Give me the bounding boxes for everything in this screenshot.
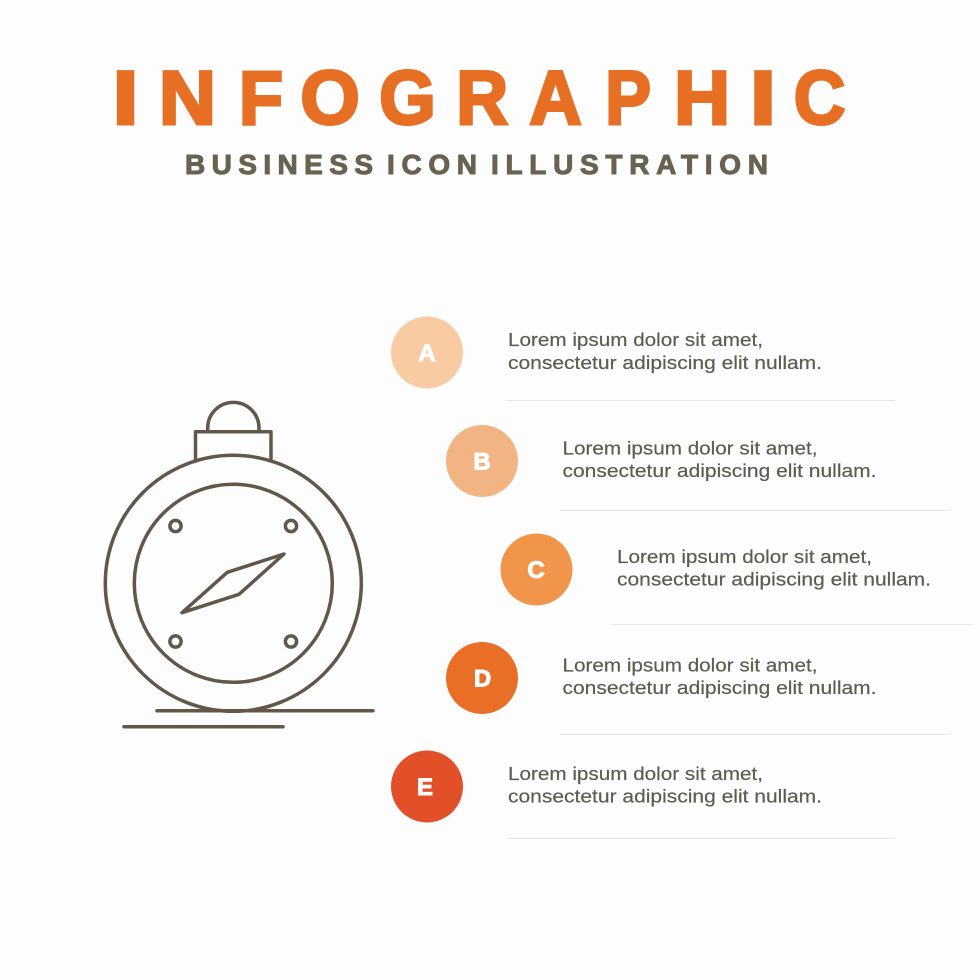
title: H xyxy=(674,56,730,141)
item E xyxy=(391,750,895,839)
title xyxy=(112,56,845,141)
title: P xyxy=(605,56,651,141)
subtitle: ICON xyxy=(387,149,477,180)
item C xyxy=(500,534,972,625)
title: G xyxy=(379,56,436,141)
item E: consectetur adipiscing elit nullam. xyxy=(508,786,822,806)
item A: Lorem ipsum dolor sit amet, xyxy=(508,329,763,350)
item A: consectetur adipiscing elit nullam. xyxy=(508,352,822,373)
item C: C xyxy=(527,557,545,584)
title: I xyxy=(112,56,139,141)
subtitle: BUSINESS xyxy=(185,149,373,180)
title: A xyxy=(529,56,582,141)
item B: B xyxy=(473,448,491,476)
item E: Lorem ipsum dolor sit amet, xyxy=(508,763,763,784)
item D xyxy=(446,642,950,735)
item D: D xyxy=(474,666,491,692)
icon: compass xyxy=(105,402,373,727)
subtitle: ILLUSTRATION xyxy=(491,149,768,180)
title: O xyxy=(300,56,360,141)
title: R xyxy=(456,56,508,141)
item E: E xyxy=(417,774,433,801)
item C: Lorem ipsum dolor sit amet, xyxy=(617,546,872,567)
item C: consectetur adipiscing elit nullam. xyxy=(617,568,931,590)
title: F xyxy=(239,56,283,141)
subtitle xyxy=(185,149,768,180)
item B: consectetur adipiscing elit nullam. xyxy=(562,460,876,481)
item A xyxy=(391,316,895,401)
item A: A xyxy=(418,340,436,367)
title: C xyxy=(794,56,845,141)
item B xyxy=(446,425,950,511)
title: I xyxy=(750,56,776,141)
item B: Lorem ipsum dolor sit amet, xyxy=(562,438,818,458)
item D: Lorem ipsum dolor sit amet, xyxy=(562,654,818,676)
item D: consectetur adipiscing elit nullam. xyxy=(562,677,876,698)
title: N xyxy=(159,56,216,141)
